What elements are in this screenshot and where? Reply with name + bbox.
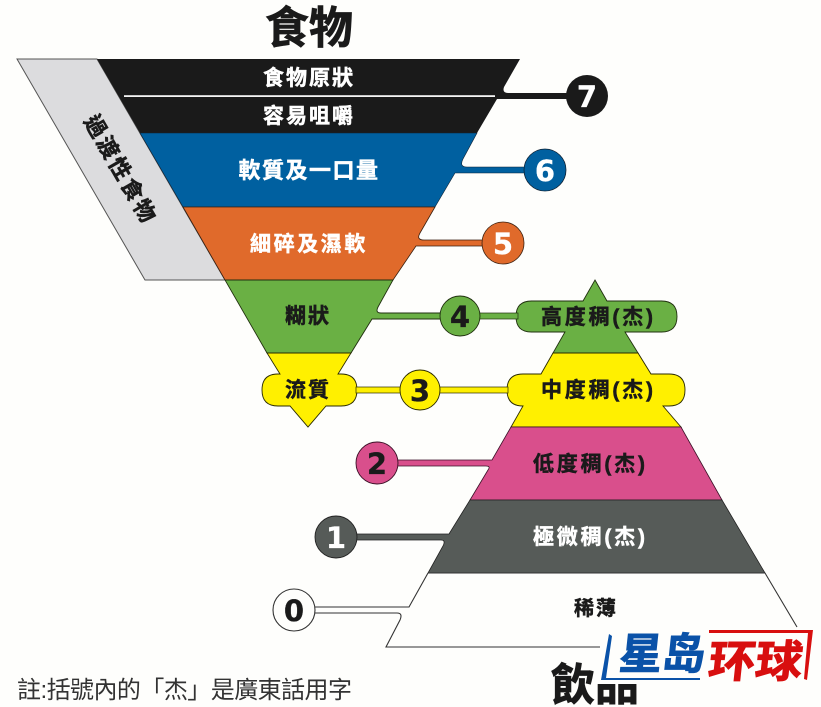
drink pyramid: level 4 extremely thick <box>516 280 677 353</box>
food level 3: liquidised <box>262 353 357 427</box>
number 5: 5 <box>493 227 513 261</box>
text: soft and bite sized: 軟質及一口量 <box>238 158 380 183</box>
number 6: 6 <box>535 154 555 188</box>
food level 6: soft and bite sized <box>140 133 566 207</box>
text: liquidised: 流質 <box>285 379 331 402</box>
food level 4: pureed <box>225 280 445 353</box>
text: minced and moist: 細碎及濕軟 <box>250 233 368 256</box>
number 7: 7 <box>577 80 597 114</box>
drink pyramid: level 1 slightly thick <box>315 500 765 573</box>
number 1: 1 <box>326 521 346 555</box>
text: Sing Tao: 星岛 <box>617 631 708 679</box>
text: moderately thick: 中度稠(杰) <box>541 379 653 402</box>
text: Global: 环球 <box>706 638 805 687</box>
connector and badge 4 <box>440 296 518 336</box>
number 0: 0 <box>284 594 304 628</box>
drink pyramid: level 2 mildly thick <box>356 427 722 500</box>
text: thin: 稀薄 <box>574 597 618 620</box>
label: transitional foods: 過渡性食物 <box>79 111 162 229</box>
food level 7: regular and easy to chew <box>97 59 608 133</box>
text: extremely thick: 高度稠(杰) <box>541 305 653 329</box>
drink pyramid: level 3 moderately thick <box>507 353 685 427</box>
number 2: 2 <box>367 447 387 481</box>
title: food: 食物 <box>265 4 353 53</box>
text: pureed: 糊狀 <box>285 305 331 328</box>
text: slightly thick: 極微稠(杰) <box>533 526 645 549</box>
number 4: 4 <box>450 300 470 334</box>
panel: transitional foods <box>17 59 225 280</box>
text: regular food: 食物原狀 <box>263 66 355 90</box>
text: easy to chew: 容易咀嚼 <box>263 104 355 128</box>
logo: Sing Tao Headline <box>600 629 816 687</box>
text: mildly thick: 低度稠(杰) <box>533 453 645 476</box>
number 3: 3 <box>410 374 430 408</box>
food level 5: minced and moist <box>183 207 524 280</box>
footnote: 註:括號內的「杰」是廣東話用字 <box>17 677 352 704</box>
connector and badge 3 <box>356 370 508 410</box>
drink pyramid: level 0 thin <box>273 573 797 647</box>
